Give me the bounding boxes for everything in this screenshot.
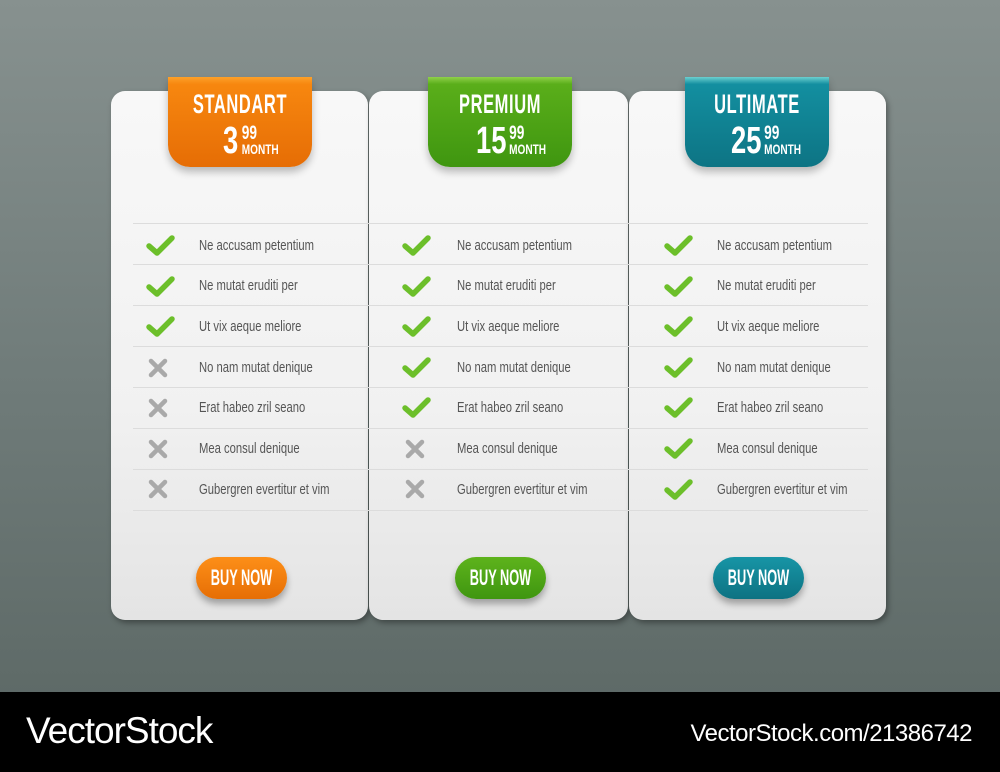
feature list: premium: Ut vix aeque meliore (457, 319, 559, 335)
tab: premium header: PREMIUM (459, 89, 541, 119)
icon: check (664, 276, 693, 297)
tab: standart header: 99 (242, 123, 257, 144)
panel: premium card (369, 91, 628, 620)
tab: standart header: 3 (223, 120, 238, 162)
footer: watermark bar (0, 692, 1000, 772)
feature list: premium: Ne mutat eruditi per (457, 278, 556, 294)
icon: check (146, 235, 175, 256)
feature list: ultimate: Ne accusam petentium (717, 238, 832, 254)
tab: ultimate header: 25 (731, 120, 761, 162)
feature list: premium: Mea consul denique (457, 441, 558, 457)
icon: cross (406, 480, 424, 498)
feature list: standart: Mea consul denique (199, 441, 300, 457)
button: ultimate buy now (713, 557, 804, 599)
tab: standart header: MONTH (242, 141, 279, 157)
feature list: standart: Ut vix aeque meliore (199, 319, 301, 335)
button: premium buy now: BUY NOW (470, 565, 531, 590)
tab: premium header (428, 77, 572, 167)
icon: check (402, 397, 431, 418)
panel: standart card (111, 91, 368, 620)
feature list: ultimate: No nam mutat denique (717, 360, 831, 376)
icon: check (664, 438, 693, 459)
icon: check (146, 276, 175, 297)
tab: premium header: 99 (509, 123, 524, 144)
tab: standart header (168, 77, 312, 167)
tab: ultimate header: MONTH (764, 141, 801, 157)
icon: cross (148, 480, 168, 498)
tab: premium header: MONTH (509, 141, 546, 157)
feature list: premium: Gubergren evertitur et vim (457, 482, 588, 498)
icon: check (664, 235, 693, 256)
icon: cross (148, 358, 168, 378)
icon: check (146, 316, 175, 337)
feature list: standart: Ne mutat eruditi per (199, 278, 298, 294)
tab: premium header: 15 (476, 120, 506, 162)
icon: check (402, 357, 431, 378)
feature list: ultimate (664, 235, 848, 500)
tab: ultimate header: ULTIMATE (714, 89, 800, 119)
button: standart buy now: BUY NOW (211, 565, 272, 590)
tab: standart header: STANDART (193, 89, 287, 119)
icon: check (402, 276, 431, 297)
feature list: premium (402, 235, 588, 498)
feature list: standart: No nam mutat denique (199, 360, 313, 376)
icon: cross (148, 398, 168, 418)
tab: ultimate header (685, 77, 829, 167)
tab: ultimate header: 99 (764, 123, 779, 144)
feature list: premium: No nam mutat denique (457, 360, 571, 376)
icon: check (402, 316, 431, 337)
button: premium buy now (455, 557, 546, 599)
icon: cross (148, 440, 168, 458)
feature list: premium: Erat habeo zril seano (457, 400, 563, 416)
button: standart buy now (196, 557, 287, 599)
footer logo text: VectorStock (26, 710, 212, 751)
icon: cross (406, 440, 424, 458)
icon: check (664, 316, 693, 337)
icon: check (664, 397, 693, 418)
feature list: standart: Erat habeo zril seano (199, 400, 305, 416)
icon: check (402, 235, 431, 256)
feature list: ultimate: Gubergren evertitur et vim (717, 482, 848, 498)
row dividers (133, 223, 868, 511)
panel: ultimate card (629, 91, 886, 620)
feature list: standart: Ne accusam petentium (199, 238, 314, 254)
feature list: standart: Gubergren evertitur et vim (199, 482, 330, 498)
feature list: ultimate: Ut vix aeque meliore (717, 319, 819, 335)
icon: check (664, 479, 693, 500)
button: ultimate buy now: BUY NOW (728, 565, 789, 590)
feature list: standart (146, 235, 330, 498)
feature list: premium: Ne accusam petentium (457, 238, 572, 254)
feature list: ultimate: Ne mutat eruditi per (717, 278, 816, 294)
footer url: VectorStock.com/21386742 (690, 720, 972, 747)
feature list: ultimate: Mea consul denique (717, 441, 818, 457)
feature list: ultimate: Erat habeo zril seano (717, 400, 823, 416)
icon: check (664, 357, 693, 378)
